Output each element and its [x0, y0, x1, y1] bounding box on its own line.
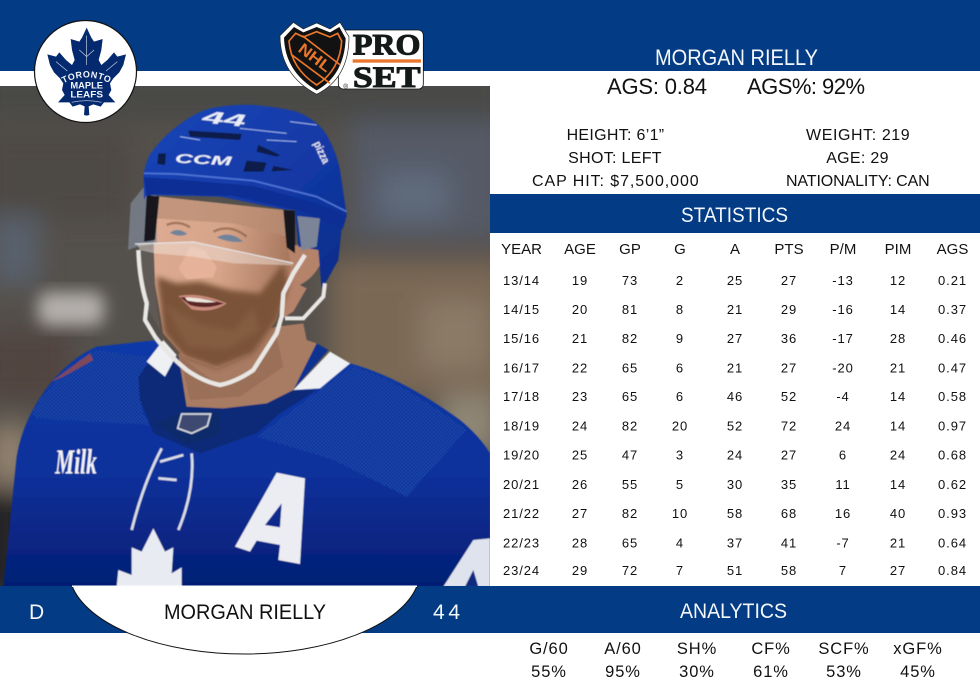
season 19/20: 6: [839, 448, 847, 462]
season 16/17: 21: [890, 360, 906, 376]
table header row: PTS: [774, 241, 804, 258]
player bio, right column: WEIGHT: 219: [806, 127, 910, 144]
NHL shield: NHL: [295, 40, 334, 76]
table header row: PIM: [885, 241, 911, 258]
player bio, left column: HEIGHT: 6’1”: [567, 127, 664, 144]
season 20/21: 11: [835, 477, 851, 492]
season 21/22: [503, 506, 967, 521]
neck: [178, 323, 317, 408]
helmet number: 44: [199, 106, 248, 131]
season 17/18: 65: [622, 389, 638, 404]
blurred crowd highlight: [38, 292, 104, 326]
season 15/16: 28: [890, 331, 906, 346]
table header row: P/M: [830, 241, 856, 258]
season 16/17: 6: [676, 360, 684, 376]
analytics values: 61%: [753, 663, 789, 681]
season 16/17: 16/17: [503, 360, 540, 376]
season 16/17: 21: [727, 360, 743, 376]
season 23/24: [503, 563, 967, 578]
season 17/18: 6: [676, 389, 684, 404]
analytics values: [531, 663, 936, 681]
season 22/23: 4: [676, 536, 684, 550]
season 23/24: 0.84: [938, 563, 967, 578]
season 14/15: 8: [676, 302, 684, 317]
season 14/15: 0.37: [938, 302, 967, 317]
season 13/14: 12: [890, 273, 906, 288]
PRO SET wordmark: PRO: [353, 29, 420, 61]
NHL shield: [280, 22, 349, 94]
helmet brand: CCM: [175, 152, 233, 169]
analytics labels: A/60: [604, 640, 642, 658]
season 18/19: 72: [781, 418, 797, 434]
season 22/23: 28: [572, 536, 588, 550]
season 17/18: 17/18: [503, 389, 540, 404]
season 23/24: 58: [781, 563, 797, 578]
player bio, right column: AGE: 29: [826, 150, 889, 167]
season 14/15: -16: [832, 302, 854, 317]
season 21/22: 10: [672, 506, 688, 521]
season 16/17: 27: [781, 360, 797, 376]
season 22/23: 65: [622, 536, 638, 550]
season 23/24: 23/24: [503, 563, 540, 578]
table header row: G: [674, 241, 686, 258]
statistics table: [501, 241, 968, 578]
helmet sponsor: pizza: [311, 140, 332, 166]
team logo: Toronto Maple Leafs: [34, 20, 138, 124]
season 17/18: [503, 389, 967, 404]
season 19/20: 25: [572, 448, 588, 462]
background gap behind strap: [140, 250, 160, 330]
season 23/24: 72: [622, 563, 638, 578]
NHL collar crest: [178, 414, 211, 433]
AGS summary: AGS%: 92%: [747, 74, 865, 99]
season 20/21: 35: [781, 477, 797, 492]
season 14/15: 29: [781, 302, 797, 317]
beard: [157, 263, 288, 368]
player bio, left column: SHOT: LEFT: [568, 150, 662, 167]
season 13/14: 25: [727, 273, 743, 288]
season 18/19: 20: [672, 418, 688, 434]
collar white trim: [147, 340, 177, 377]
season 16/17: 0.47: [938, 360, 967, 376]
AGS summary: AGS: 0.84: [607, 74, 707, 99]
season 16/17: 65: [622, 360, 638, 376]
analytics labels: xGF%: [893, 640, 943, 658]
jersey: [3, 340, 490, 587]
player photo: [0, 70, 510, 600]
season 17/18: 14: [890, 389, 906, 404]
season 20/21: 55: [622, 477, 638, 492]
season 16/17: 22: [572, 360, 588, 376]
collar: [138, 357, 317, 453]
season 22/23: [503, 536, 967, 550]
season 13/14: 19: [572, 273, 588, 288]
season 23/24: 7: [676, 563, 684, 578]
ear and jaw: [283, 244, 320, 318]
season 22/23: 21: [890, 536, 906, 550]
analytics labels: CF%: [751, 640, 791, 658]
season 14/15: 14: [890, 302, 906, 317]
season 19/20: 3: [676, 448, 684, 462]
nose: [179, 256, 216, 280]
season 15/16: 21: [572, 331, 588, 346]
analytics values: 53%: [826, 663, 862, 681]
forehead shade: [157, 197, 287, 237]
season 21/22: 82: [622, 506, 638, 521]
table header row: A: [730, 241, 740, 258]
analytics labels: G/60: [529, 640, 569, 658]
name plate semi-ellipse: MORGAN RIELLY: [164, 601, 326, 624]
analytics labels: SH%: [677, 640, 717, 658]
statistics heading band: [490, 194, 980, 233]
season 15/16: 82: [622, 331, 638, 346]
season 20/21: 26: [572, 477, 588, 492]
name plate semi-ellipse: [72, 586, 417, 654]
helmet: [143, 105, 347, 290]
season 13/14: 73: [622, 273, 638, 288]
season 18/19: 24: [572, 418, 588, 434]
chin strap: [138, 250, 305, 385]
season 15/16: 27: [727, 331, 743, 346]
season 16/17: -20: [832, 360, 854, 376]
player figure: [3, 105, 490, 587]
top blue header band: [0, 0, 980, 71]
season 21/22: 68: [781, 506, 797, 521]
statistics heading band: STATISTICS: [681, 204, 788, 227]
season 22/23: 41: [781, 536, 797, 550]
season 22/23: 37: [727, 536, 743, 550]
season 21/22: 58: [727, 506, 743, 521]
table header row: AGE: [564, 241, 596, 258]
face: [153, 197, 291, 368]
season 21/22: 0.93: [938, 506, 967, 521]
player bio, right column: NATIONALITY: CAN: [786, 173, 930, 190]
season 20/21: 30: [727, 477, 743, 492]
analytics values: 55%: [531, 663, 567, 681]
season 20/21: 14: [890, 477, 906, 492]
jersey maple leaf: [117, 528, 182, 587]
season 23/24: 7: [839, 563, 847, 578]
analytics labels: [529, 640, 943, 658]
season 13/14: 27: [781, 273, 797, 288]
season 17/18: 52: [781, 389, 797, 404]
season 13/14: 2: [676, 273, 684, 288]
season 23/24: 27: [890, 563, 906, 578]
season 15/16: 0.46: [938, 331, 967, 346]
season 20/21: 20/21: [503, 477, 540, 492]
registered mark: ®: [343, 82, 348, 90]
jersey yoke mesh: [32, 350, 150, 425]
season 15/16: -17: [832, 331, 854, 346]
season 13/14: -13: [832, 273, 854, 288]
visor: [128, 183, 157, 250]
sleeve letter A: [443, 538, 490, 587]
season 20/21: 0.62: [938, 477, 967, 492]
season 19/20: [503, 448, 967, 462]
team logo: Toronto Maple Leafs: MAPLE: [70, 80, 103, 90]
season 16/17: [503, 360, 967, 376]
position label: D: [29, 601, 44, 624]
analytics heading: ANALYTICS: [680, 600, 787, 623]
season 18/19: 14: [890, 418, 906, 434]
season 13/14: 13/14: [503, 273, 540, 288]
analytics values: 30%: [679, 663, 715, 681]
season 17/18: -4: [836, 389, 850, 404]
season 22/23: 0.64: [938, 536, 967, 550]
season 19/20: 19/20: [503, 448, 540, 462]
season 19/20: 24: [727, 448, 743, 462]
player bio, right column: [786, 127, 930, 190]
player bio, left column: [532, 127, 699, 190]
analytics values: 95%: [605, 663, 641, 681]
season 20/21: 5: [676, 477, 684, 492]
mouth: [178, 295, 227, 310]
season 18/19: 24: [835, 418, 851, 434]
bottom blue band: [0, 586, 980, 633]
jersey number: 44: [433, 601, 460, 624]
season 14/15: 14/15: [503, 302, 540, 317]
AGS summary: [607, 74, 865, 99]
season 18/19: 18/19: [503, 418, 540, 434]
season 13/14: [503, 273, 967, 288]
season 18/19: [503, 418, 967, 434]
season 15/16: 9: [676, 331, 684, 346]
table header row: YEAR: [501, 241, 542, 258]
season 15/16: [503, 331, 967, 346]
season 18/19: 52: [727, 418, 743, 434]
season 14/15: 21: [727, 302, 743, 317]
NHL Pro Set logo: [280, 22, 423, 94]
analytics labels: SCF%: [818, 640, 870, 658]
season 19/20: 0.68: [938, 448, 967, 462]
season 14/15: [503, 302, 967, 317]
sponsor patch: Milk: [55, 443, 97, 481]
season 21/22: 27: [572, 506, 588, 521]
eyes: [170, 230, 187, 236]
season 22/23: 22/23: [503, 536, 540, 550]
season 21/22: 16: [835, 506, 851, 521]
captain letter A: [235, 473, 305, 564]
season 15/16: 15/16: [503, 331, 540, 346]
player bio, left column: CAP HIT: $7,500,000: [532, 173, 699, 190]
season 17/18: 23: [572, 389, 588, 404]
season 17/18: 0.58: [938, 389, 967, 404]
player name heading: MORGAN RIELLY: [655, 45, 818, 70]
team logo: Toronto Maple Leafs: TORONTO: [61, 71, 110, 82]
team logo: Toronto Maple Leafs: LEAFS: [70, 90, 103, 100]
season 14/15: 81: [622, 302, 638, 317]
season 18/19: 82: [622, 418, 638, 434]
season 21/22: 21/22: [503, 506, 540, 521]
season 19/20: 24: [890, 448, 906, 462]
season 19/20: 27: [781, 448, 797, 462]
laces: [132, 448, 192, 530]
season 22/23: -7: [836, 536, 850, 550]
season 15/16: 36: [781, 331, 797, 346]
season 14/15: 20: [572, 302, 588, 317]
table header row: GP: [619, 241, 641, 258]
white strip above photo: [0, 71, 490, 86]
season 17/18: 46: [727, 389, 743, 404]
season 18/19: 0.97: [938, 418, 967, 434]
analytics values: 45%: [900, 663, 936, 681]
table header row: [501, 241, 968, 258]
season 21/22: 40: [890, 506, 906, 521]
season 23/24: 51: [727, 563, 743, 578]
season 23/24: 29: [572, 563, 588, 578]
table header row: AGS: [937, 241, 968, 258]
season 20/21: [503, 477, 967, 492]
season 19/20: 47: [622, 448, 638, 462]
NHL Pro Set logo: SET: [353, 62, 421, 94]
season 13/14: 0.21: [938, 273, 967, 288]
